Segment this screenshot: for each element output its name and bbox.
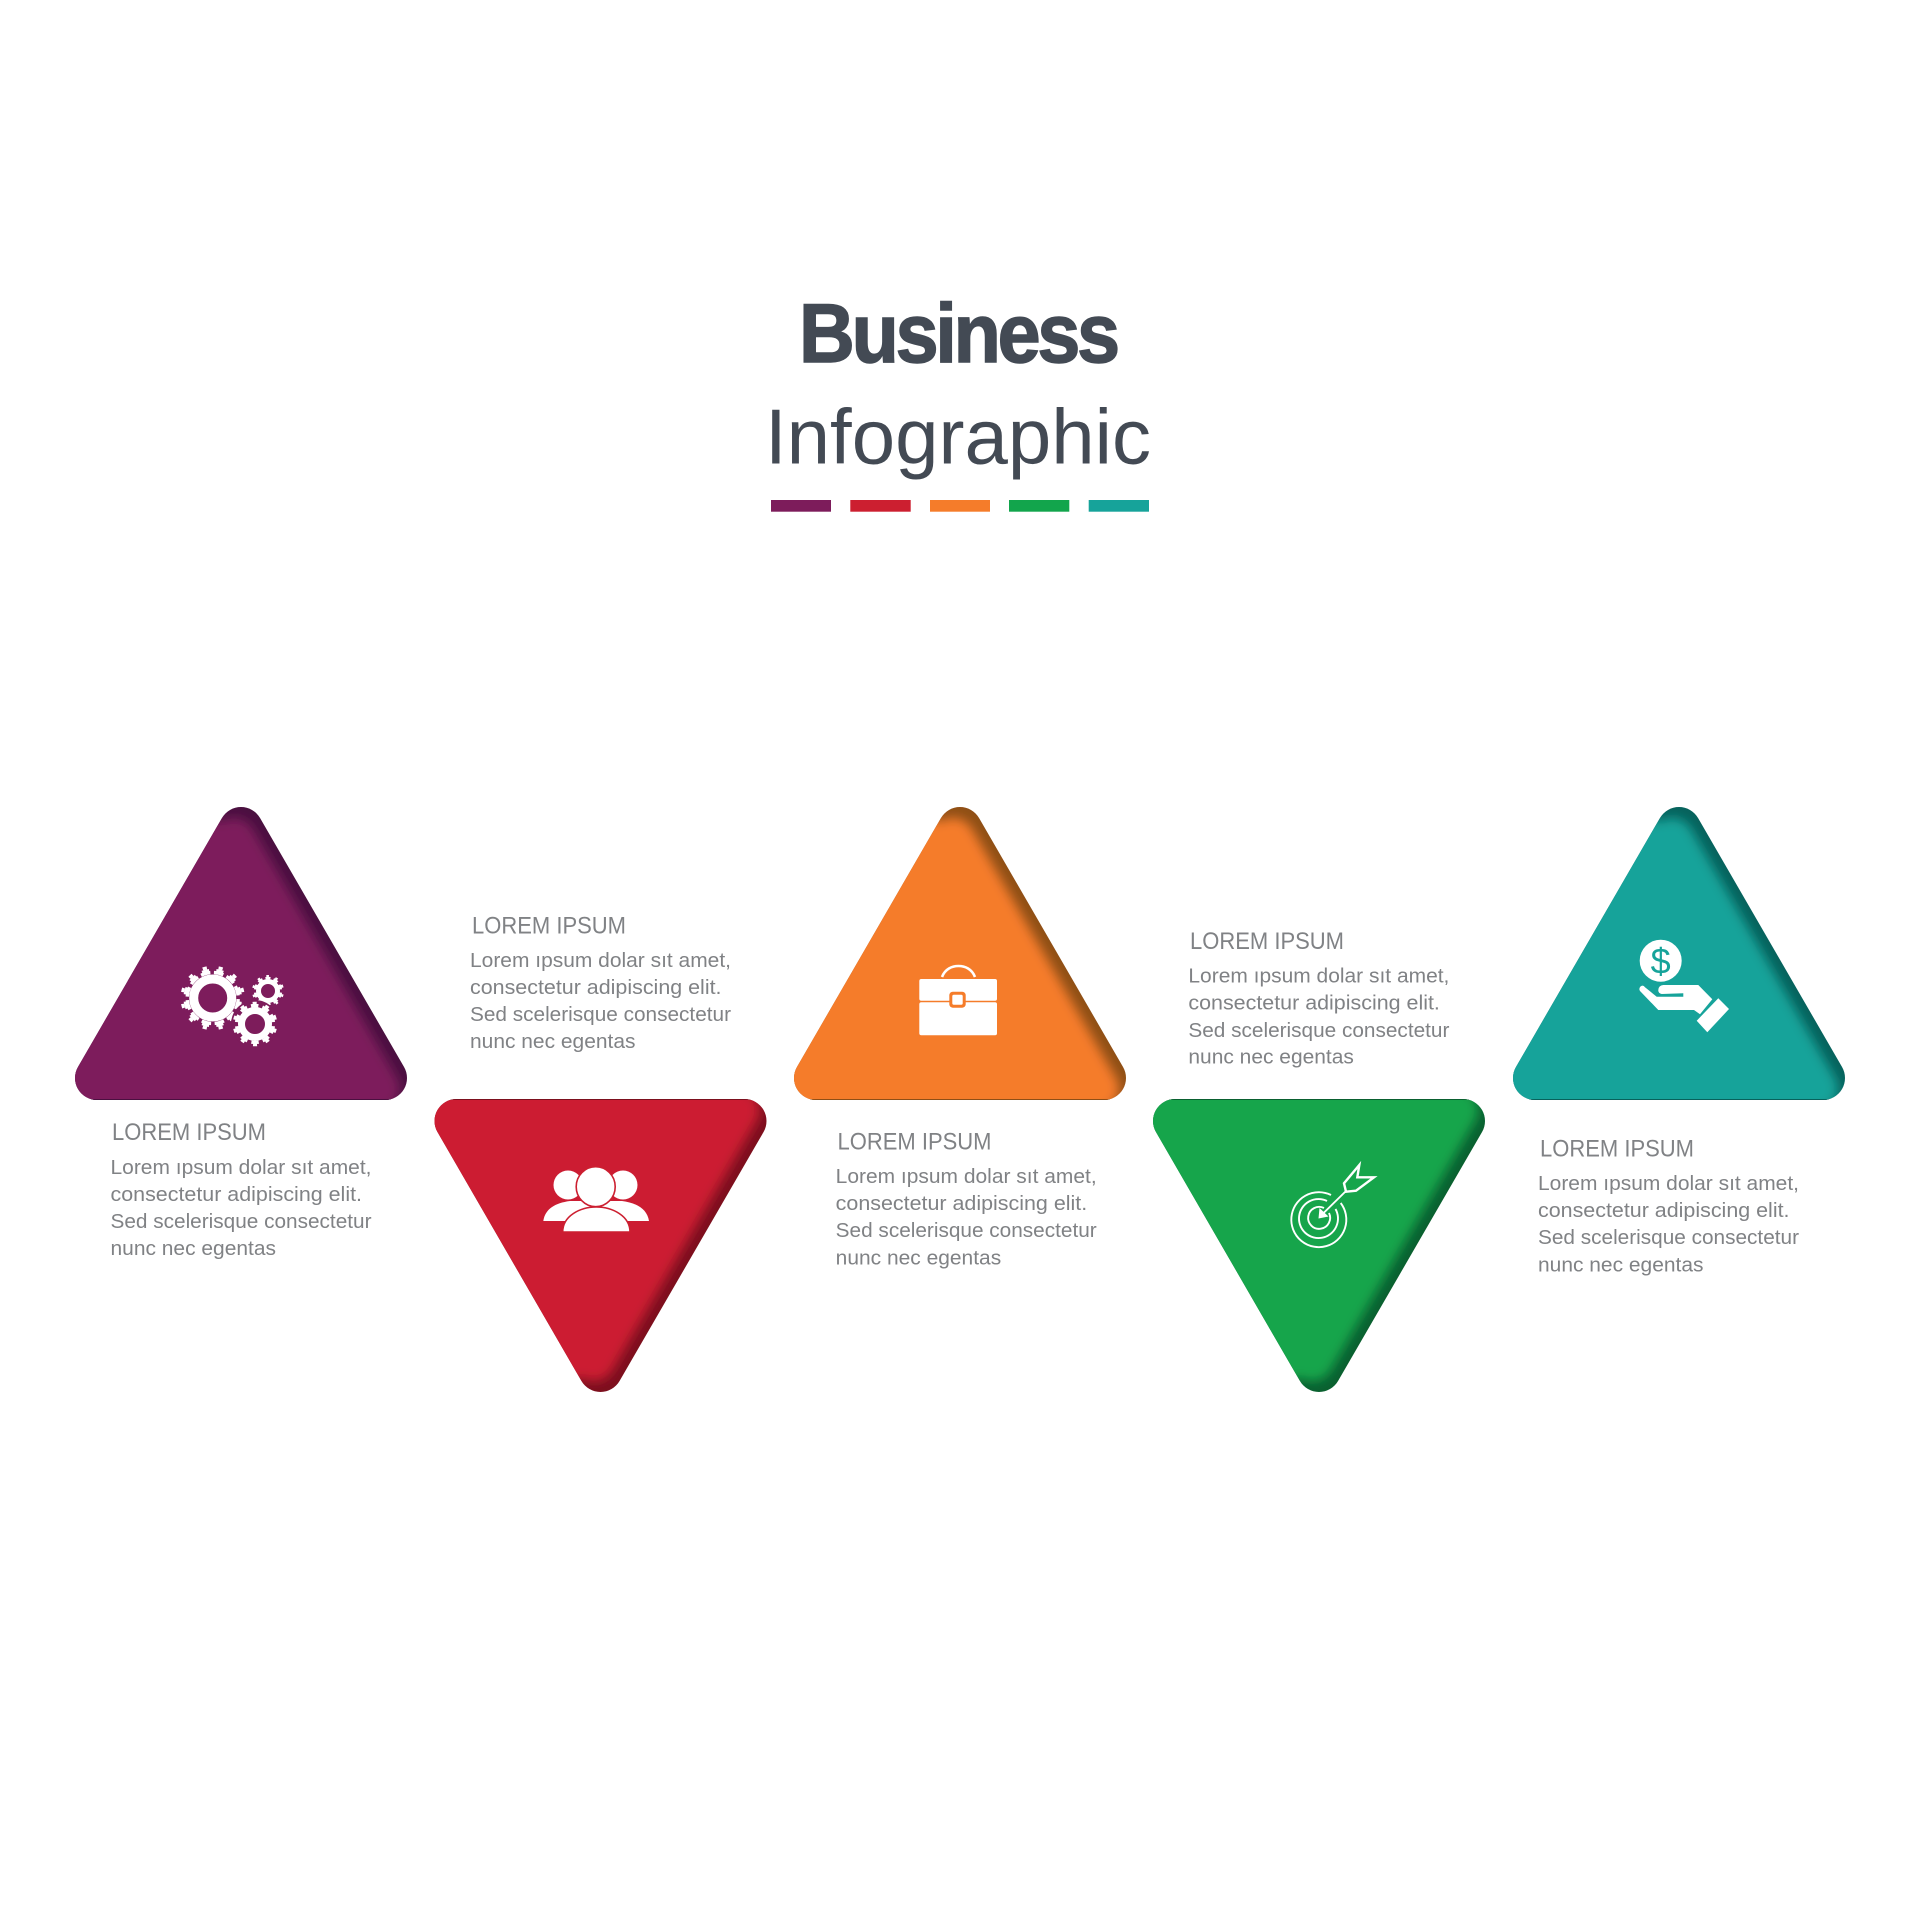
text block: teal: Sed scelerisque consectetur: [1538, 1226, 1799, 1249]
text block: purple: [110, 1119, 372, 1260]
icon: briefcase: [919, 966, 997, 1035]
text block: purple: LOREM IPSUM: [112, 1119, 266, 1146]
text block: red: Lorem ıpsum dolar sıt amet,: [470, 949, 731, 972]
text block: red: LOREM IPSUM: [472, 912, 626, 940]
icon: hand holding coin: [1639, 940, 1729, 1032]
text block: teal: consectetur adipiscing elit.: [1538, 1199, 1790, 1222]
icon: hand holding coin: $: [1651, 940, 1671, 982]
panel: green triangle: [1153, 1099, 1485, 1392]
icon: gears: [177, 962, 288, 1052]
text block: purple: Lorem ıpsum dolar sıt amet,: [110, 1156, 372, 1179]
text block: green: nunc nec egentas: [1188, 1046, 1354, 1069]
text block: green: [1188, 928, 1450, 1069]
colour bars under title: [771, 500, 1149, 512]
text block: teal: [1538, 1136, 1799, 1276]
panel: teal triangle: [1513, 807, 1845, 1100]
text block: red: Sed scelerisque consectetur: [470, 1003, 731, 1026]
subtitle: Infographic: Infographic: [765, 392, 1151, 480]
text block: teal: nunc nec egentas: [1538, 1253, 1704, 1276]
text block: orange: Lorem ıpsum dolar sıt amet,: [836, 1165, 1097, 1188]
text block: orange: Sed scelerisque consectetur: [836, 1219, 1097, 1242]
text block: green: Sed scelerisque consectetur: [1188, 1019, 1450, 1042]
text block: teal: LOREM IPSUM: [1540, 1136, 1694, 1162]
panel: red triangle: [434, 1099, 766, 1392]
title: Business: Business: [799, 287, 1120, 381]
text block: red: nunc nec egentas: [470, 1030, 636, 1053]
text block: green: Lorem ıpsum dolar sıt amet,: [1188, 965, 1449, 988]
icon: target with arrow: [1291, 1165, 1374, 1247]
panel: orange triangle: [794, 807, 1126, 1100]
text block: orange: nunc nec egentas: [836, 1246, 1001, 1269]
text block: green: consectetur adipiscing elit.: [1188, 992, 1440, 1015]
text block: purple: consectetur adipiscing elit.: [110, 1183, 362, 1206]
text block: orange: [836, 1128, 1097, 1269]
text block: green: LOREM IPSUM: [1190, 928, 1344, 955]
text block: teal: Lorem ıpsum dolar sıt amet,: [1538, 1172, 1799, 1195]
text block: purple: nunc nec egentas: [110, 1237, 276, 1260]
text block: red: [470, 912, 731, 1053]
icon: people: [543, 1167, 649, 1232]
text block: red: consectetur adipiscing elit.: [470, 976, 722, 999]
text block: purple: Sed scelerisque consectetur: [110, 1210, 372, 1233]
text block: orange: consectetur adipiscing elit.: [836, 1192, 1087, 1215]
text block: orange: LOREM IPSUM: [838, 1128, 992, 1156]
panel: purple triangle: [75, 807, 407, 1100]
